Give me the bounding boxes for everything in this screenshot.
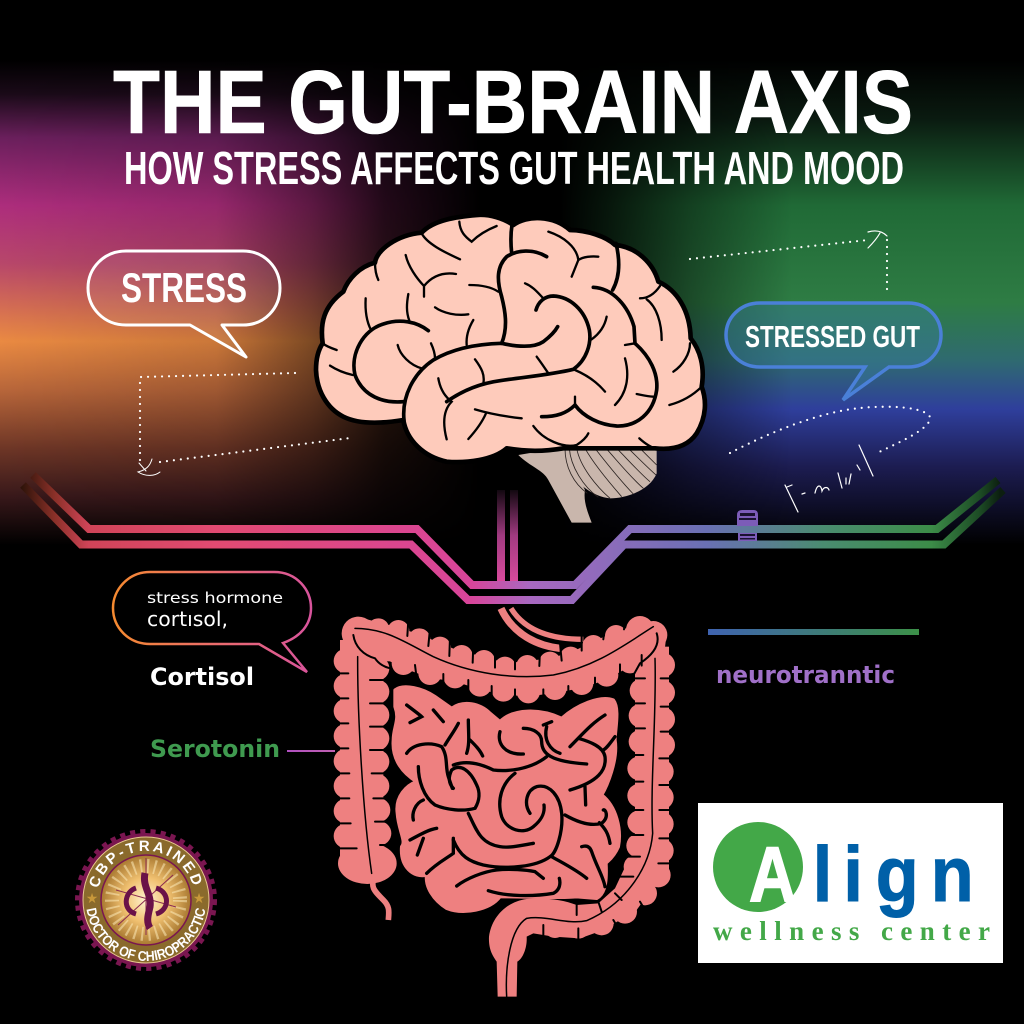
brain [316,215,705,523]
appendix [373,875,389,920]
brainstem and cerebellum [518,447,657,523]
badge: CBP-trained: DOCTOR OF CHIROPRACTIC [86,908,205,961]
nerve pathways [23,475,1003,600]
minor folds [323,222,702,449]
intestines [333,608,677,997]
logo: Align Wellness Center: lign [813,831,974,918]
badge: CBP-trained [75,829,217,971]
callout: stressed gut [726,303,941,400]
badge: CBP-trained: ★ [86,890,98,906]
badge: CBP-trained: CBP-TRAINED [90,840,202,887]
cerebrum [316,215,705,462]
descending colon [624,647,675,887]
major folds [354,225,657,426]
callout: stress hormone cortisol [113,572,311,672]
upper nerve line [33,475,998,585]
callout: stress: STRESS [121,264,247,311]
badge: CBP-trained: ★ [193,890,205,906]
label: serotonin: Serotonin [150,735,280,763]
callout: stress hormone cortisol: cortısol, [147,607,228,631]
esophageal tube into gut [501,608,583,648]
logo: Align Wellness Center [698,803,1003,963]
ascending colon [334,640,397,884]
small intestine folds [407,705,615,896]
vertical nerve trunk [497,490,518,581]
large intestine [334,616,675,997]
dotted arrow: stress to brain [138,373,350,475]
dotted curve and scribble [730,407,930,512]
callout: stress hormone cortisol: stress hormone [147,589,283,607]
transverse colon [342,616,667,703]
logo: Align Wellness Center: A [749,830,796,918]
label: cortisol: Cortisol [150,663,254,691]
logo: Align Wellness Center: wellness center [713,916,990,946]
title: THE GUT-BRAIN AXIS [113,53,913,153]
label bar: neurotransmitter [708,629,919,635]
lower nerve line [23,485,1003,600]
sigmoid colon and rectum [489,833,667,997]
colon fold lines [333,613,677,997]
small intestine [393,687,619,911]
nerve connector [737,510,758,541]
callout: stressed gut: STRESSED GUT [745,319,920,354]
callout: stress [88,251,280,357]
dotted arrow: brain to gut top [690,231,887,290]
label: neurotranntic: neurotranntic [716,661,895,689]
background colour glow [0,71,1024,538]
